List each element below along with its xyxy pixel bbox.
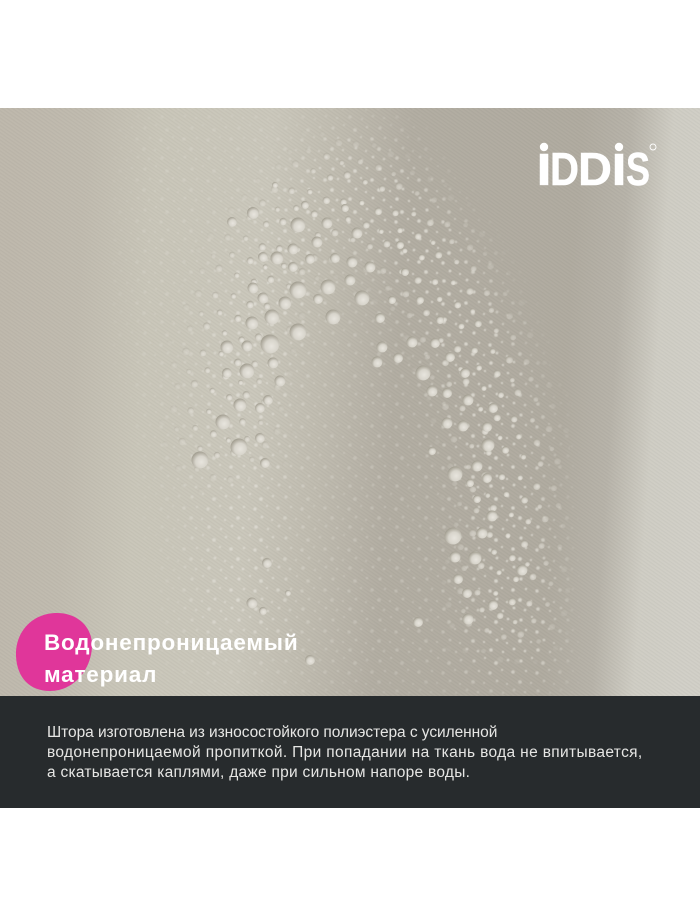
small water droplets [144,116,572,694]
icon: IDDIS logo: i [611,133,627,198]
text block: description: Штора изготовлена из износостойкого полиэстера с усиленной [47,724,497,741]
icon: IDDIS logo: D [550,143,579,195]
icon: IDDIS logo: D [578,143,612,195]
text block: description [47,724,643,781]
icon: IDDIS logo [540,142,656,186]
text block: description: а скатывается каплями, даже при сильном напоре воды. [47,764,470,781]
icon: pink blob behind heading [16,613,92,691]
panel: water-repellent fabric photo [0,108,700,696]
heading [44,630,298,687]
icon: IDDIS logo: S [626,143,650,195]
heading: материал [44,662,157,687]
text block: description: водонепроницаемой пропиткой. При попадании на ткань вода не впитывается, [47,744,643,761]
icon: IDDIS logo: i [536,133,552,198]
medium water droplets [173,142,566,660]
heading: Водонепроницаемый [44,630,298,655]
panel: dark description band [0,696,700,808]
large water droplets [192,182,528,665]
